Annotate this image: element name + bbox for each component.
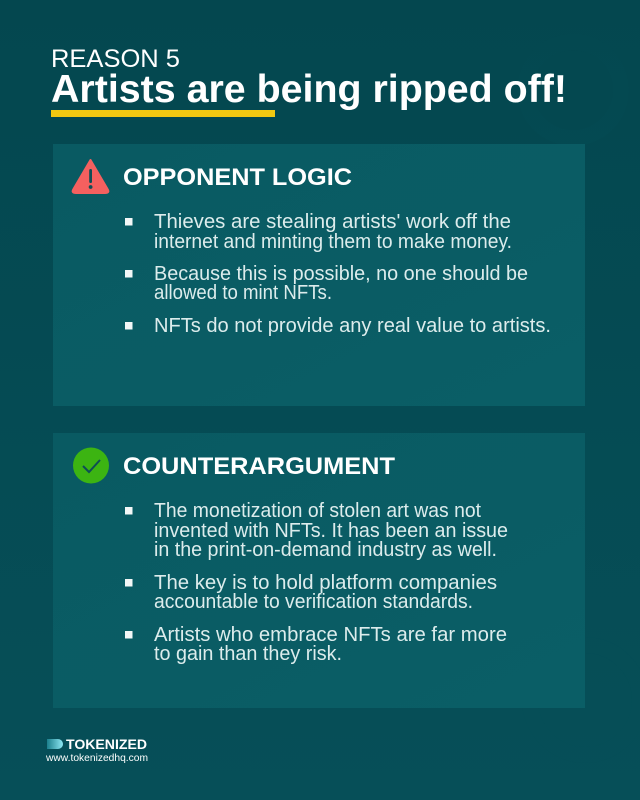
bullet list xyxy=(125,500,508,665)
icon: warning triangle xyxy=(73,160,108,193)
panel background xyxy=(53,144,585,406)
bullet list: in the print-on-demand industry as well. xyxy=(154,539,497,561)
bullet list: Artists who embrace NFTs are far more xyxy=(154,624,507,646)
bullet list: allowed to mint NFTs. xyxy=(154,282,332,304)
bullet list: Thieves are stealing artists' work off the xyxy=(154,211,511,233)
bullet list: The monetization of stolen art was not xyxy=(154,500,481,522)
bullet list xyxy=(125,211,551,337)
bullet list: accountable to verification standards. xyxy=(154,591,473,613)
yellow underline xyxy=(51,110,275,117)
eyebrow: reason number: REASON 5 xyxy=(51,45,180,73)
panel: opponent logic xyxy=(53,144,585,406)
bullet list: invented with NFTs. It has been an issue xyxy=(154,520,508,542)
bullet list: NFTs do not provide any real value to artists. xyxy=(154,315,551,337)
heading: Artists are being ripped off! xyxy=(51,68,567,111)
brand name: TOKENIZED xyxy=(66,736,147,752)
bullet list: Because this is possible, no one should be xyxy=(154,263,528,285)
panel background xyxy=(53,433,585,708)
icon: green check xyxy=(73,448,109,484)
heading: opponent logic: OPPONENT LOGIC xyxy=(123,164,352,191)
bullet list: internet and minting them to make money. xyxy=(154,231,512,253)
website: www.tokenizedhq.com xyxy=(45,752,148,764)
bullet list: The key is to hold platform companies xyxy=(154,572,497,594)
heading: counterargument: COUNTERARGUMENT xyxy=(123,453,395,480)
footer logo xyxy=(45,736,148,764)
panel: counterargument xyxy=(53,433,585,708)
title block xyxy=(51,45,567,117)
icon: logo mark xyxy=(47,739,63,749)
bullet list: to gain than they risk. xyxy=(154,643,342,665)
